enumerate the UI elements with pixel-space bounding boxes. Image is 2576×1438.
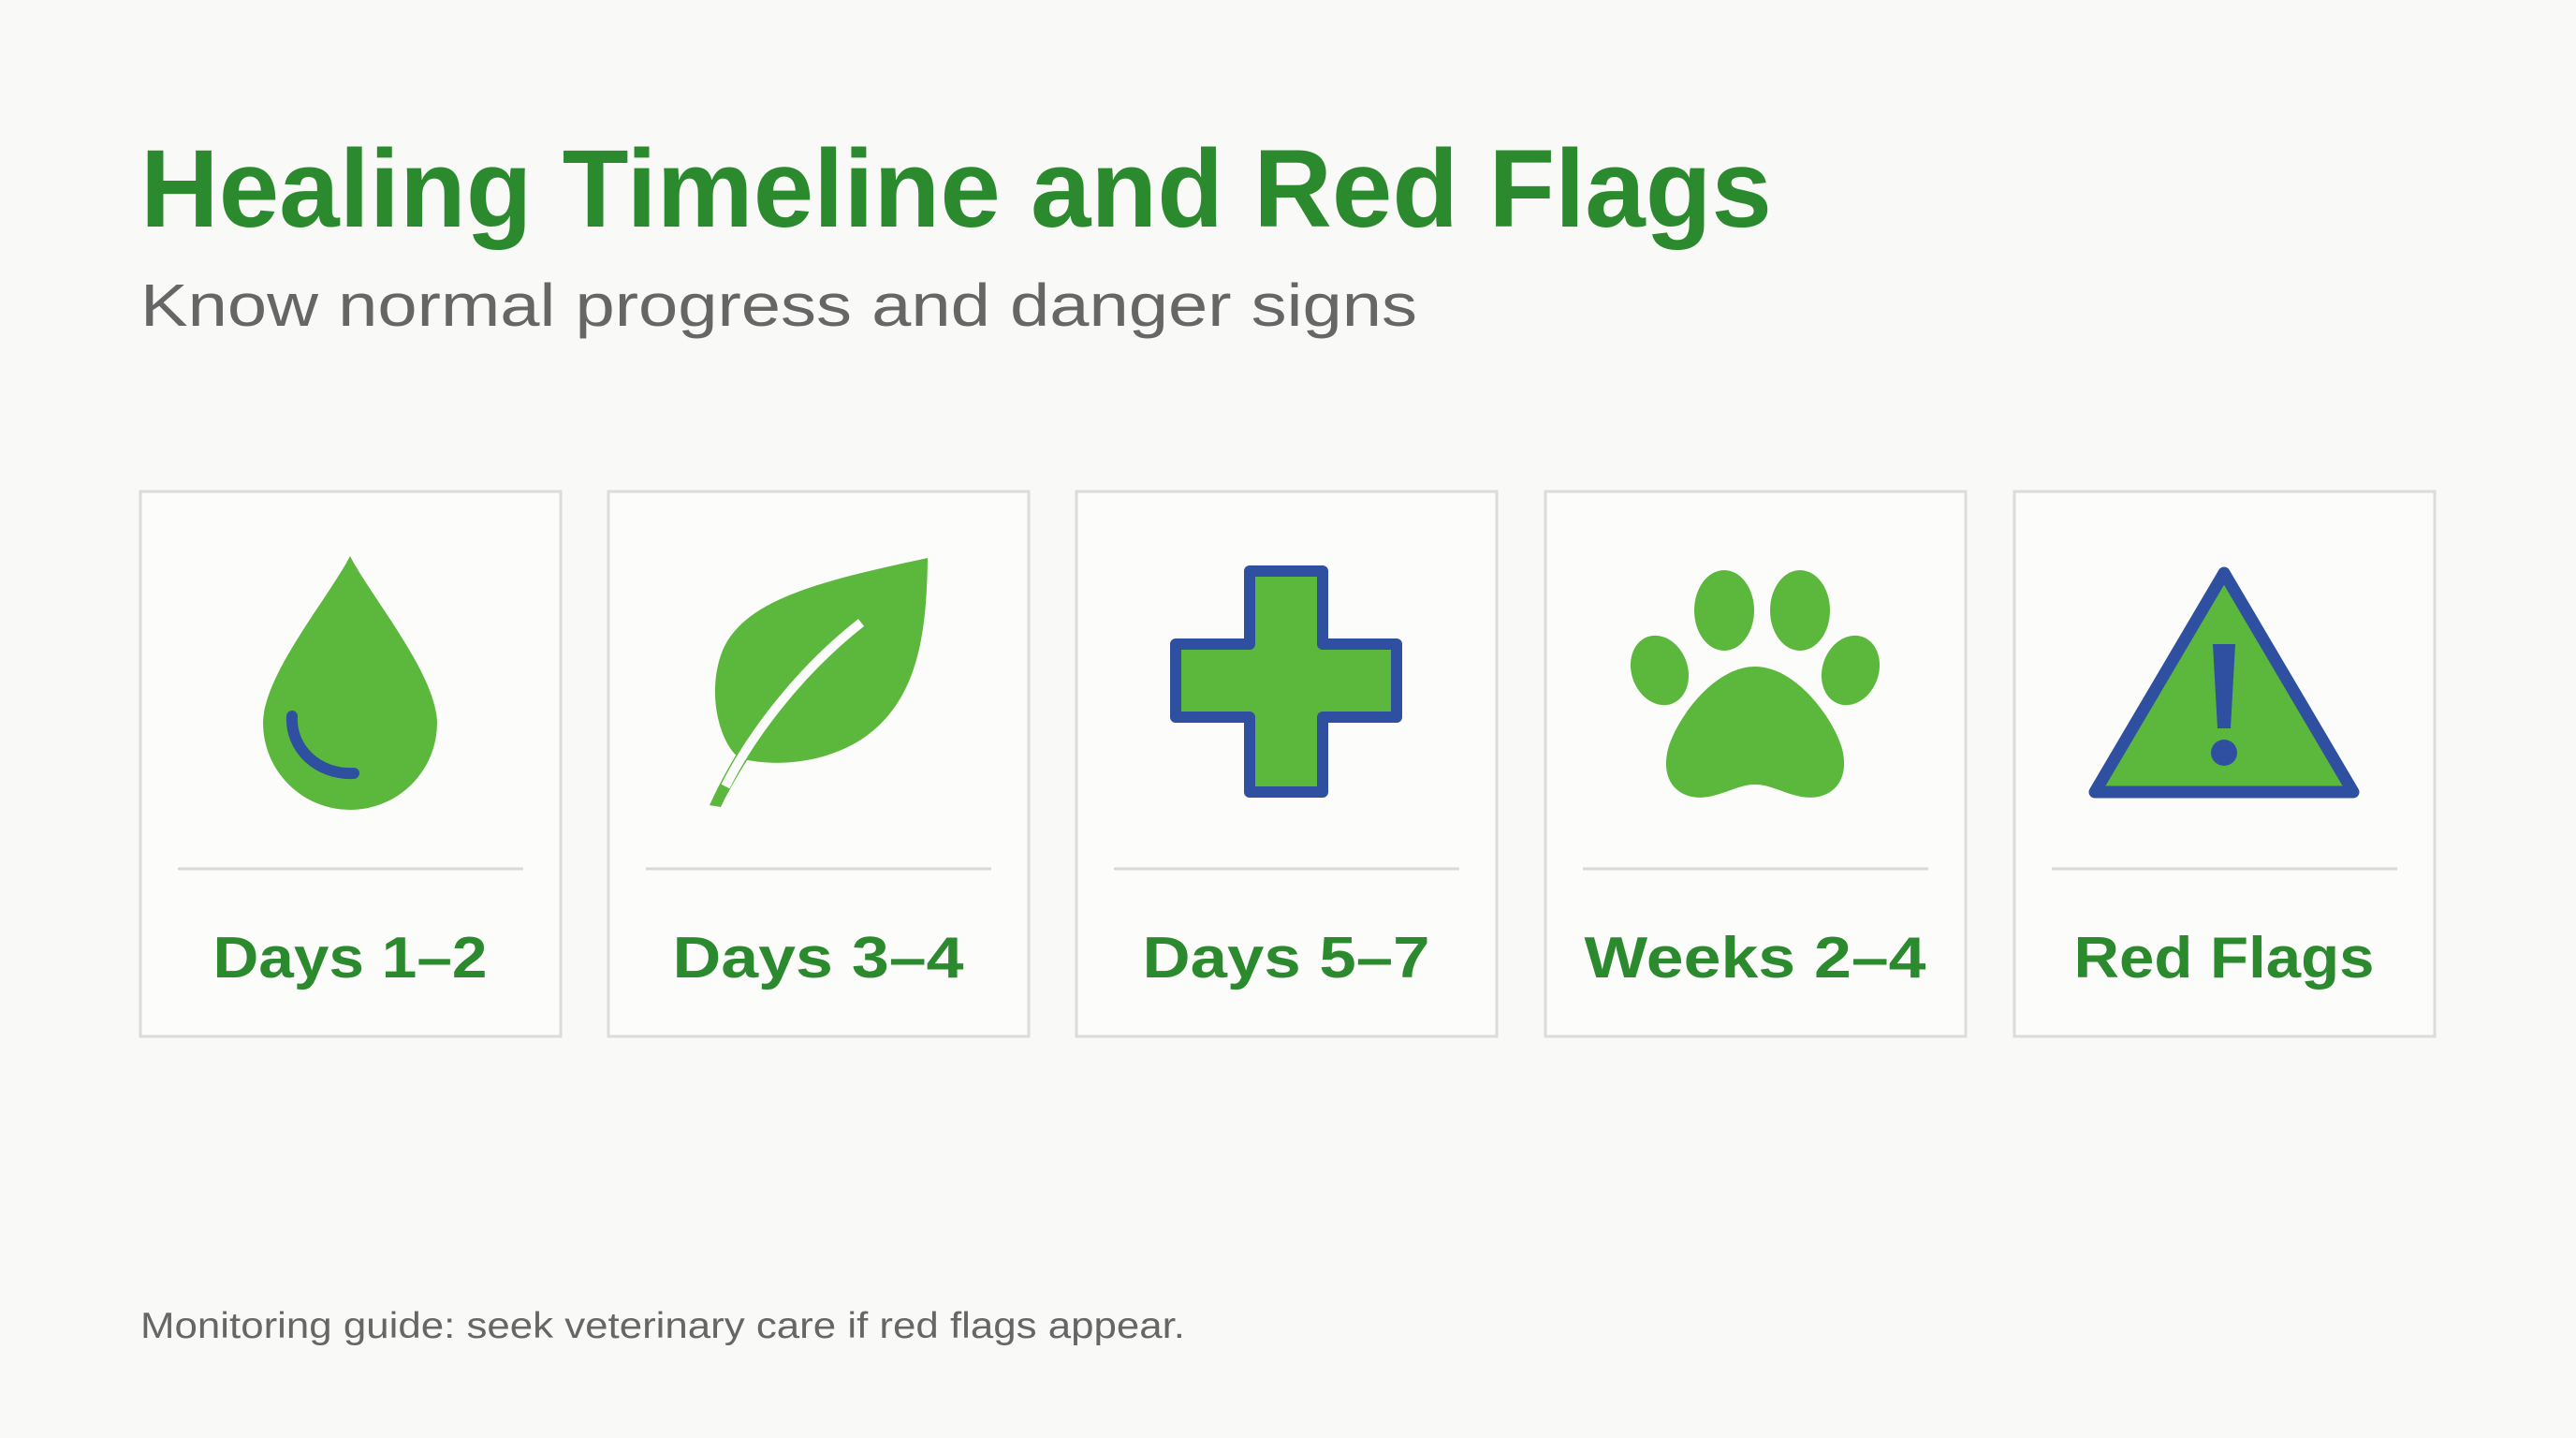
icon: leaf (710, 558, 928, 807)
icon: medical cross (1176, 571, 1397, 792)
label: Days 5–7 (1142, 926, 1430, 990)
title: Healing Timeline and Red Flags (140, 127, 1772, 251)
icon: warning triangle (2095, 573, 2353, 792)
icon: paw print (1621, 570, 1889, 798)
footer note: Monitoring guide: seek veterinary care if red flags appear. (140, 1306, 1185, 1346)
panel: Days 3-4 (608, 492, 1029, 1036)
subtitle: Know normal progress and danger signs (140, 271, 1417, 339)
icon: water drop (263, 556, 437, 810)
panel: Days 5-7 (1076, 492, 1497, 1036)
label: Red Flags (2074, 926, 2374, 990)
panel: Red Flags (2014, 492, 2435, 1036)
label: Weeks 2–4 (1584, 926, 1926, 990)
label: Days 1–2 (213, 926, 487, 990)
label: Days 3–4 (672, 926, 964, 990)
panel: Weeks 2-4 (1545, 492, 1966, 1036)
panel: Days 1-2 (140, 492, 561, 1036)
